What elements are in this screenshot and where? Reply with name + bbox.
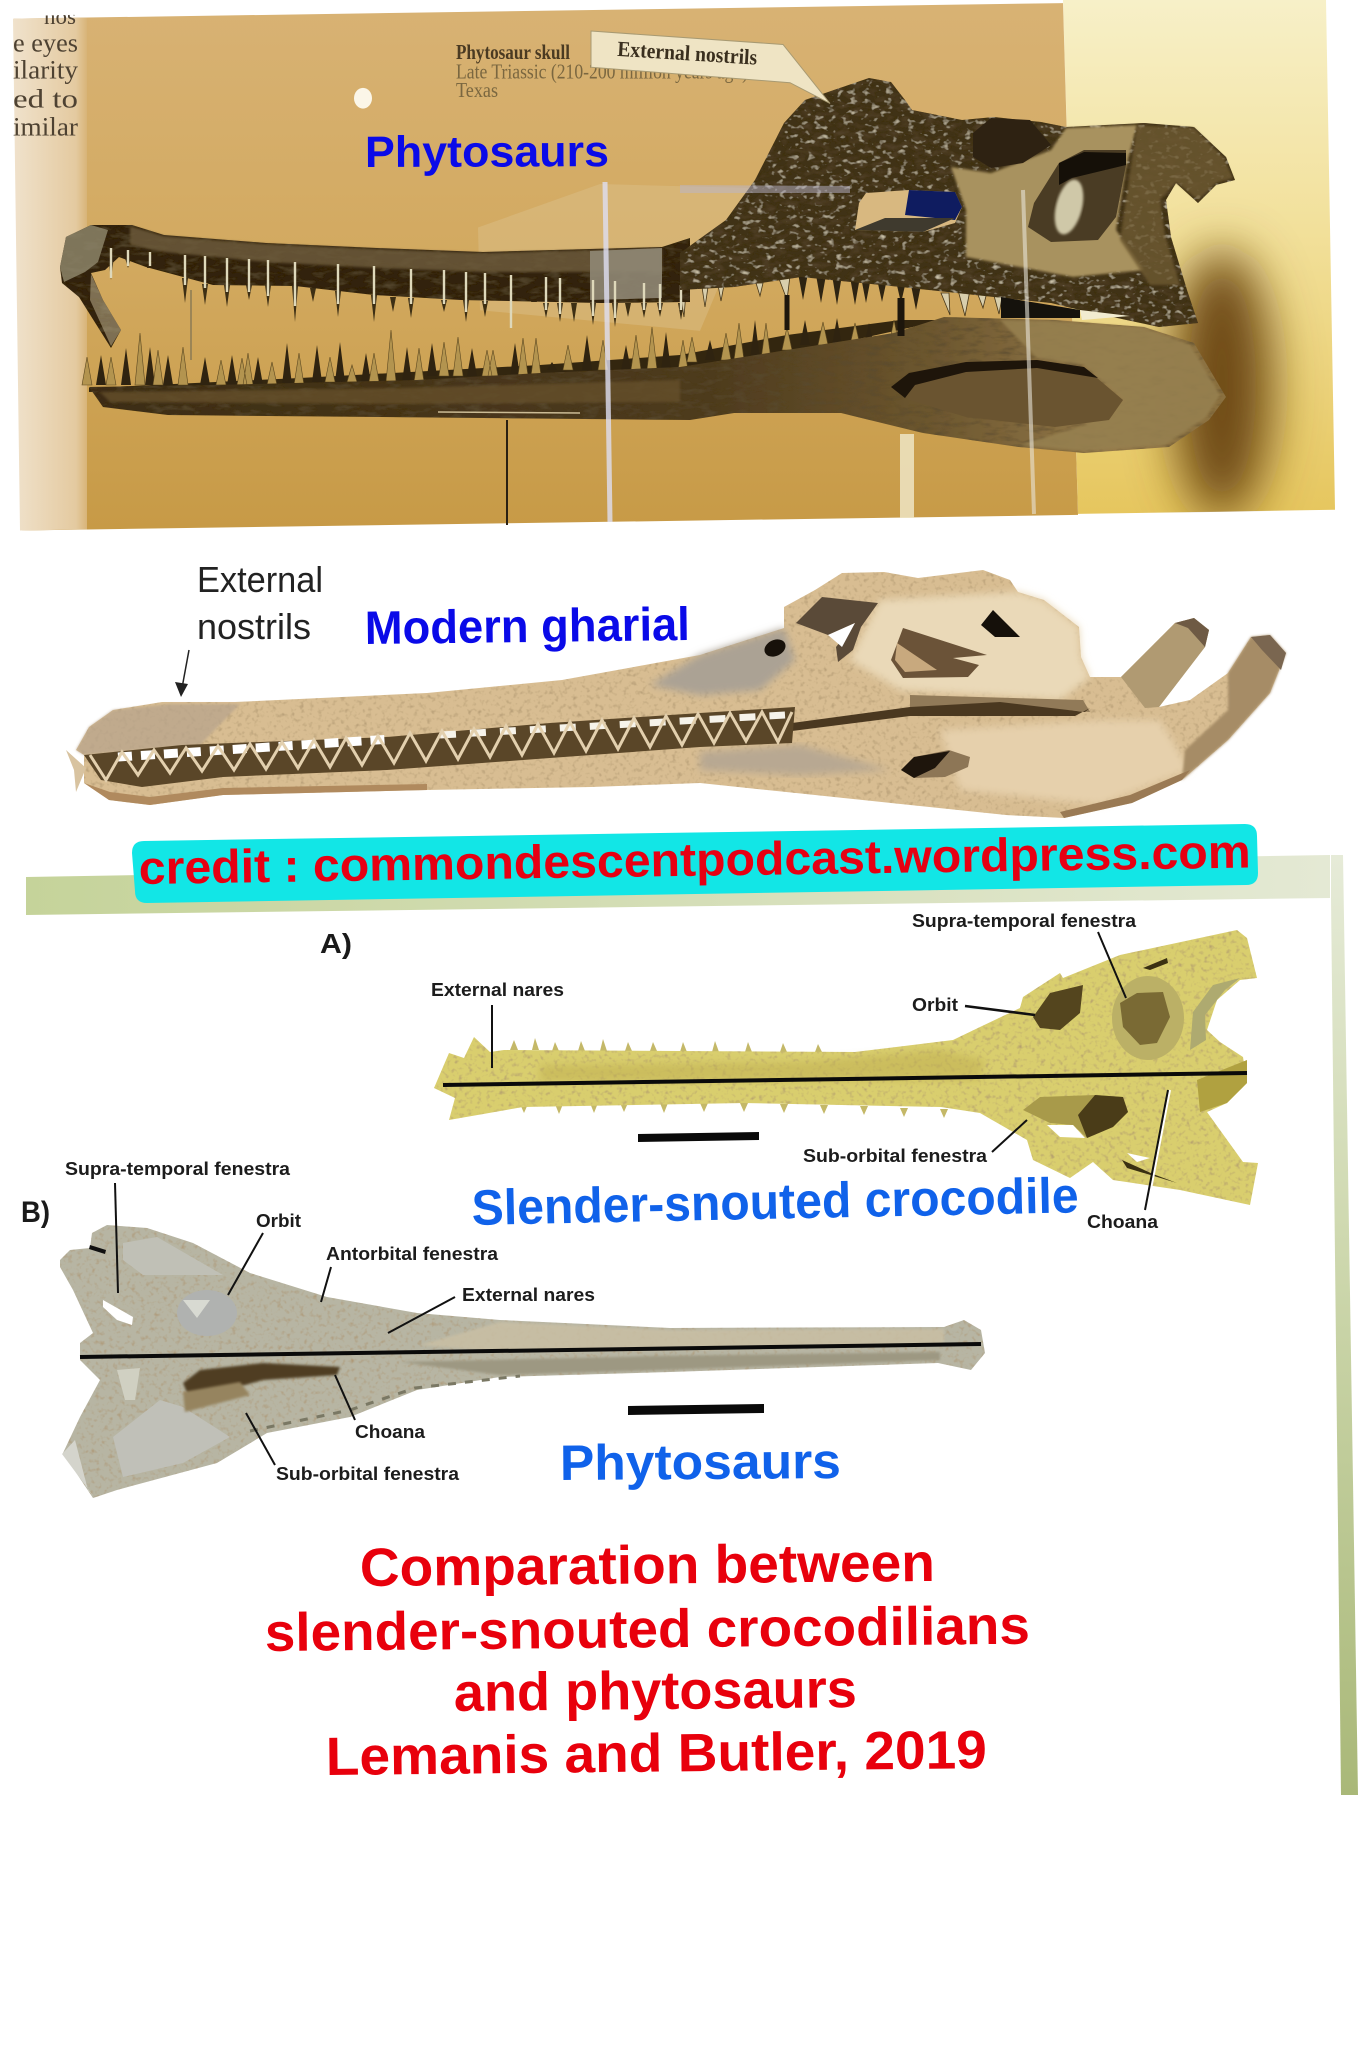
label: external nares: [388, 1284, 595, 1333]
label: supra-temporal fenestra: [912, 910, 1137, 998]
lower jaw bone: [89, 317, 1226, 453]
label: supra-temporal fenestra: Supra-temporal fenestra: [912, 910, 1137, 931]
scale bar: [628, 1404, 764, 1415]
panel: modern gharial skull: [66, 559, 1286, 818]
wall shadow behind skull: [1172, 250, 1272, 520]
label: supra-temporal fenestra: [65, 1158, 291, 1293]
heading: Modern gharial: Modern gharial: [364, 597, 690, 654]
centre line: [443, 1073, 1247, 1085]
wall text: phytosaur skull caption: Late Triassic (210-200 million years ago): [456, 61, 748, 84]
diagram A: slender-snouted crocodile skull: [320, 910, 1258, 1236]
upper snout bone: [60, 225, 690, 348]
scale bar: [638, 1132, 759, 1142]
upper teeth over snout: [111, 248, 681, 328]
credit banner: credit : commondescentpodcast.wordpress.com: [138, 825, 1251, 894]
title: comparison and citation: slender-snouted crocodilians: [265, 1596, 1030, 1663]
yellow skull: [434, 930, 1258, 1205]
label: sub-orbital fenestra: [803, 1120, 1027, 1166]
panel letter B: B): [21, 1196, 50, 1229]
wall text: cropped museum caption: nos: [44, 3, 76, 29]
label: external nares: External nares: [431, 979, 564, 1000]
grey skull: [60, 1225, 985, 1498]
wall text: cropped museum caption: e eyes: [13, 27, 78, 58]
skull openings: [855, 118, 1130, 320]
heading: Phytosaurs: Phytosaurs: [365, 127, 609, 177]
wall text: cropped museum caption: ed to: [13, 83, 78, 114]
label: external nostrils with arrow: [175, 559, 323, 697]
centre line: [80, 1344, 981, 1357]
label: sub-orbital fenestra: Sub-orbital fenestra: [803, 1145, 988, 1166]
gharial skull openings: [762, 597, 1090, 778]
placard: external nostrils: External nostrils: [617, 37, 758, 70]
heading: phytosaurs: Phytosaurs: [560, 1433, 841, 1491]
wall text: cropped museum caption: ilarity: [13, 54, 79, 85]
label: choana: Choana: [1087, 1211, 1159, 1232]
label: antorbital fenestra: Antorbital fenestra: [326, 1243, 499, 1264]
label: orbit: Orbit: [912, 994, 958, 1015]
label: choana: Choana: [355, 1421, 426, 1442]
label: choana: [1087, 1090, 1170, 1232]
label: orbit: Orbit: [256, 1210, 301, 1231]
wall text: phytosaur skull caption: [456, 42, 748, 102]
gharial skull bone: [76, 570, 1286, 818]
title: comparison and citation: Comparation between: [360, 1533, 935, 1598]
label: antorbital fenestra: [321, 1243, 499, 1302]
lower jaw teeth: [82, 318, 944, 392]
glass case reflections and stand: [507, 182, 1034, 525]
label: sub-orbital fenestra: [246, 1413, 460, 1484]
label: orbit: [912, 994, 1035, 1015]
wall text: cropped museum caption: imilar: [13, 111, 78, 142]
panel: lower green frame and white sheet: [26, 855, 1358, 1795]
label: supra-temporal fenestra: Supra-temporal fenestra: [65, 1158, 291, 1179]
title: comparison and citation: and phytosaurs: [454, 1659, 857, 1723]
label: sub-orbital fenestra: Sub-orbital fenestra: [276, 1463, 460, 1484]
placard: external nostrils: [591, 31, 830, 103]
title: comparison and citation: [265, 1533, 1030, 1787]
label: external nares: External nares: [462, 1284, 595, 1305]
diagram B: phytosaur skull: [21, 1158, 985, 1498]
heading: slender-snouted crocodile: Slender-snouted crocodile: [471, 1167, 1079, 1236]
title: comparison and citation: Lemanis and Butler, 2019: [325, 1720, 987, 1787]
label: external nostrils with arrow: nostrils: [197, 606, 311, 647]
label: orbit: [228, 1210, 301, 1295]
upper jaw teeth: [108, 256, 1003, 360]
label: external nares: [431, 979, 564, 1068]
wall text: cropped museum caption: [0, 0, 90, 142]
label: choana: [335, 1375, 426, 1442]
label: external nostrils with arrow: External: [197, 559, 323, 600]
photo wall background: [13, 0, 1335, 530]
gharial teeth row: [66, 707, 795, 792]
wall text: phytosaur skull caption: Texas: [456, 80, 498, 102]
skull rear bone: [680, 78, 1235, 327]
panel: phytosaur museum photo: [0, 0, 1335, 530]
panel letter A: A): [320, 928, 352, 959]
wall text: phytosaur skull caption: Phytosaur skull: [456, 42, 570, 64]
